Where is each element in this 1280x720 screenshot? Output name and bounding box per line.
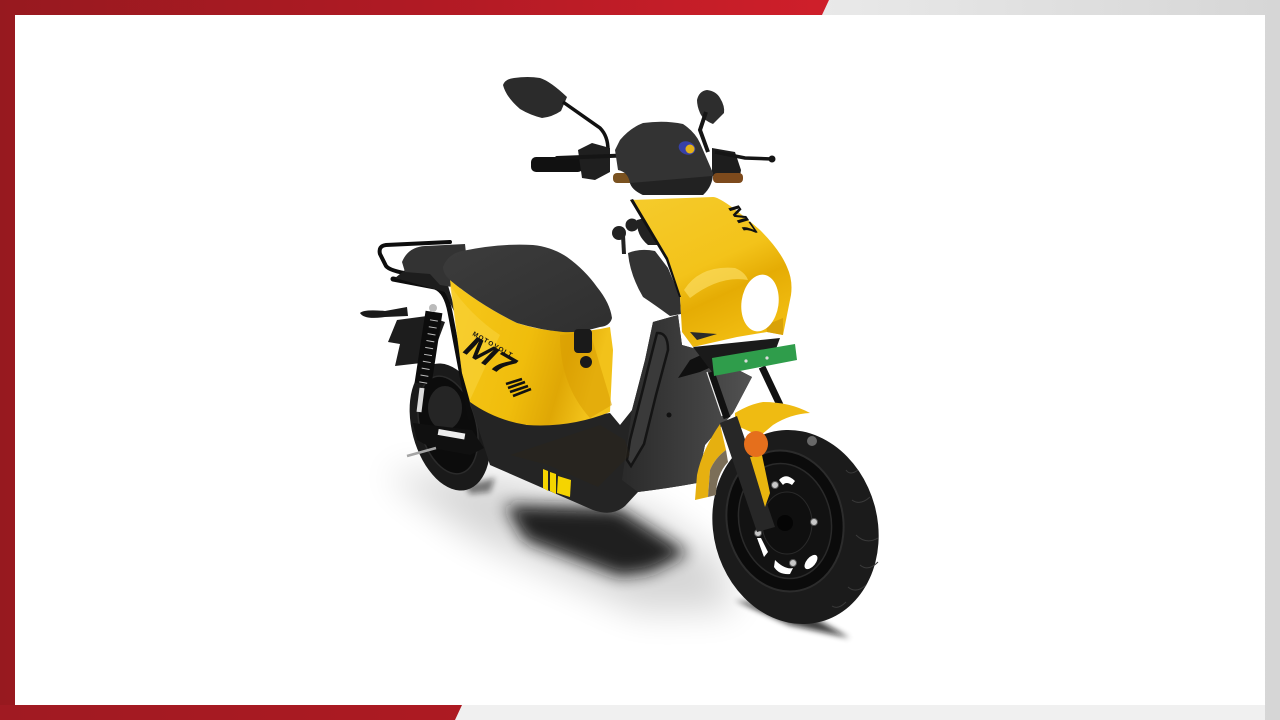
fork yellow bracket bbox=[750, 455, 770, 507]
frame: red accent bars bbox=[0, 0, 829, 720]
scooter body underframe bbox=[470, 315, 752, 513]
fork tubes bbox=[693, 338, 780, 418]
indicator lights bbox=[613, 173, 743, 183]
rear suspension spring bbox=[423, 304, 437, 384]
rear wheel bbox=[396, 354, 504, 500]
fork slider bbox=[720, 416, 775, 532]
panel logo: MOTOVOLT M7: MOTOVOLT bbox=[471, 331, 514, 360]
yellow side panel bbox=[450, 280, 613, 425]
right mirror bbox=[697, 90, 724, 152]
panel logo: MOTOVOLT M7 bbox=[458, 329, 531, 396]
headlight bbox=[738, 272, 782, 334]
right handlebar bbox=[712, 148, 776, 176]
console badge bbox=[677, 139, 697, 157]
front fender bbox=[695, 402, 810, 500]
scooter ground shadow bbox=[385, 472, 850, 638]
orange reflector bbox=[744, 431, 768, 457]
rear pillion seat bbox=[395, 244, 470, 320]
rear rack bbox=[380, 242, 470, 418]
seat latch bbox=[574, 329, 592, 368]
fairing logo: M7 bbox=[725, 201, 760, 241]
frame: grey accent bars bbox=[455, 0, 1280, 720]
rear number plate bracket bbox=[360, 307, 445, 366]
panel logo: MOTOVOLT M7: M7 bbox=[458, 329, 521, 385]
floorboard yellow stripes bbox=[543, 469, 571, 497]
front fairing bbox=[630, 197, 792, 347]
front wheel bbox=[691, 411, 900, 643]
left mirror bbox=[503, 77, 608, 150]
main seat bbox=[443, 245, 612, 332]
key and ignition bbox=[612, 215, 668, 254]
glove box shield bbox=[628, 250, 681, 316]
handlebar console bbox=[615, 122, 713, 195]
front number plate bbox=[712, 344, 797, 376]
left handlebar bbox=[531, 143, 637, 180]
